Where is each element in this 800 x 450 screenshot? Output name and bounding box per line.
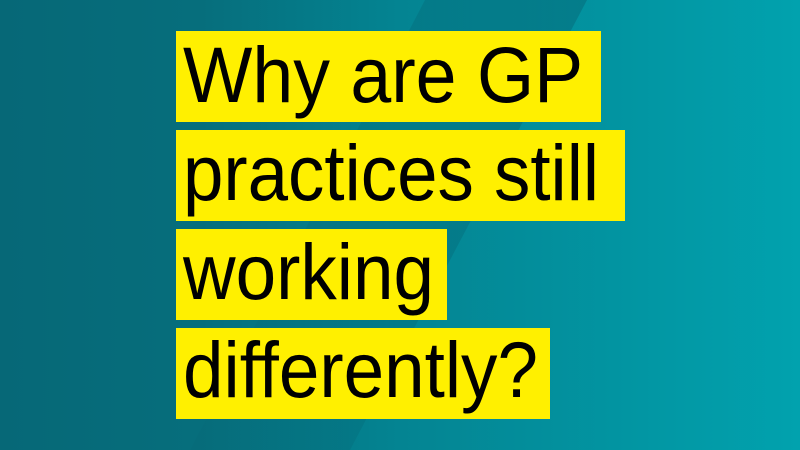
title line 1: Why are GP xyxy=(183,30,583,119)
title xyxy=(176,30,625,419)
title line 2: practices still xyxy=(183,128,599,217)
title line 3: working xyxy=(183,227,434,316)
title line 4: differently? xyxy=(183,325,538,414)
